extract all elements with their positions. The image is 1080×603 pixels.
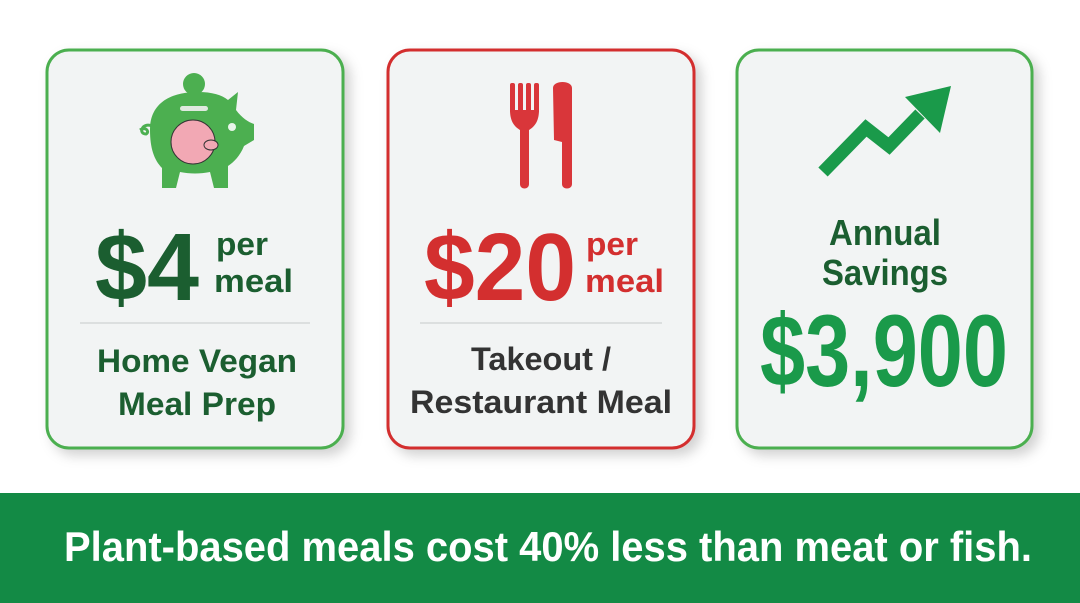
label: takeout restaurant meal: Takeout / xyxy=(471,341,611,377)
panel: takeout xyxy=(388,50,694,448)
banner: Plant-based meals cost 40% less than meat or fish. xyxy=(64,523,1032,570)
banner xyxy=(0,493,1080,603)
big price $4: $4 xyxy=(95,214,199,321)
panel: annual savings xyxy=(737,50,1032,448)
icon: piggy bank xyxy=(140,73,254,188)
heading: annual savings: Annual xyxy=(829,212,941,253)
panel: annual savings: Savings xyxy=(822,252,948,293)
panel: takeout: meal xyxy=(585,263,664,299)
label: home vegan meal prep: Home Vegan xyxy=(97,343,297,379)
panel: takeout: Restaurant Meal xyxy=(410,384,672,420)
icon: trend arrow xyxy=(823,114,920,172)
panel: home vegan meal prep xyxy=(47,50,343,448)
big value $3,900: $3,900 xyxy=(760,294,1008,408)
panel: home vegan meal prep: meal xyxy=(214,263,293,299)
per meal: per xyxy=(586,226,638,262)
icon: fork and knife xyxy=(510,82,572,188)
panel: home vegan meal prep: Meal Prep xyxy=(118,386,276,422)
per meal: per xyxy=(216,226,268,262)
big price $20: $20 xyxy=(424,214,576,321)
